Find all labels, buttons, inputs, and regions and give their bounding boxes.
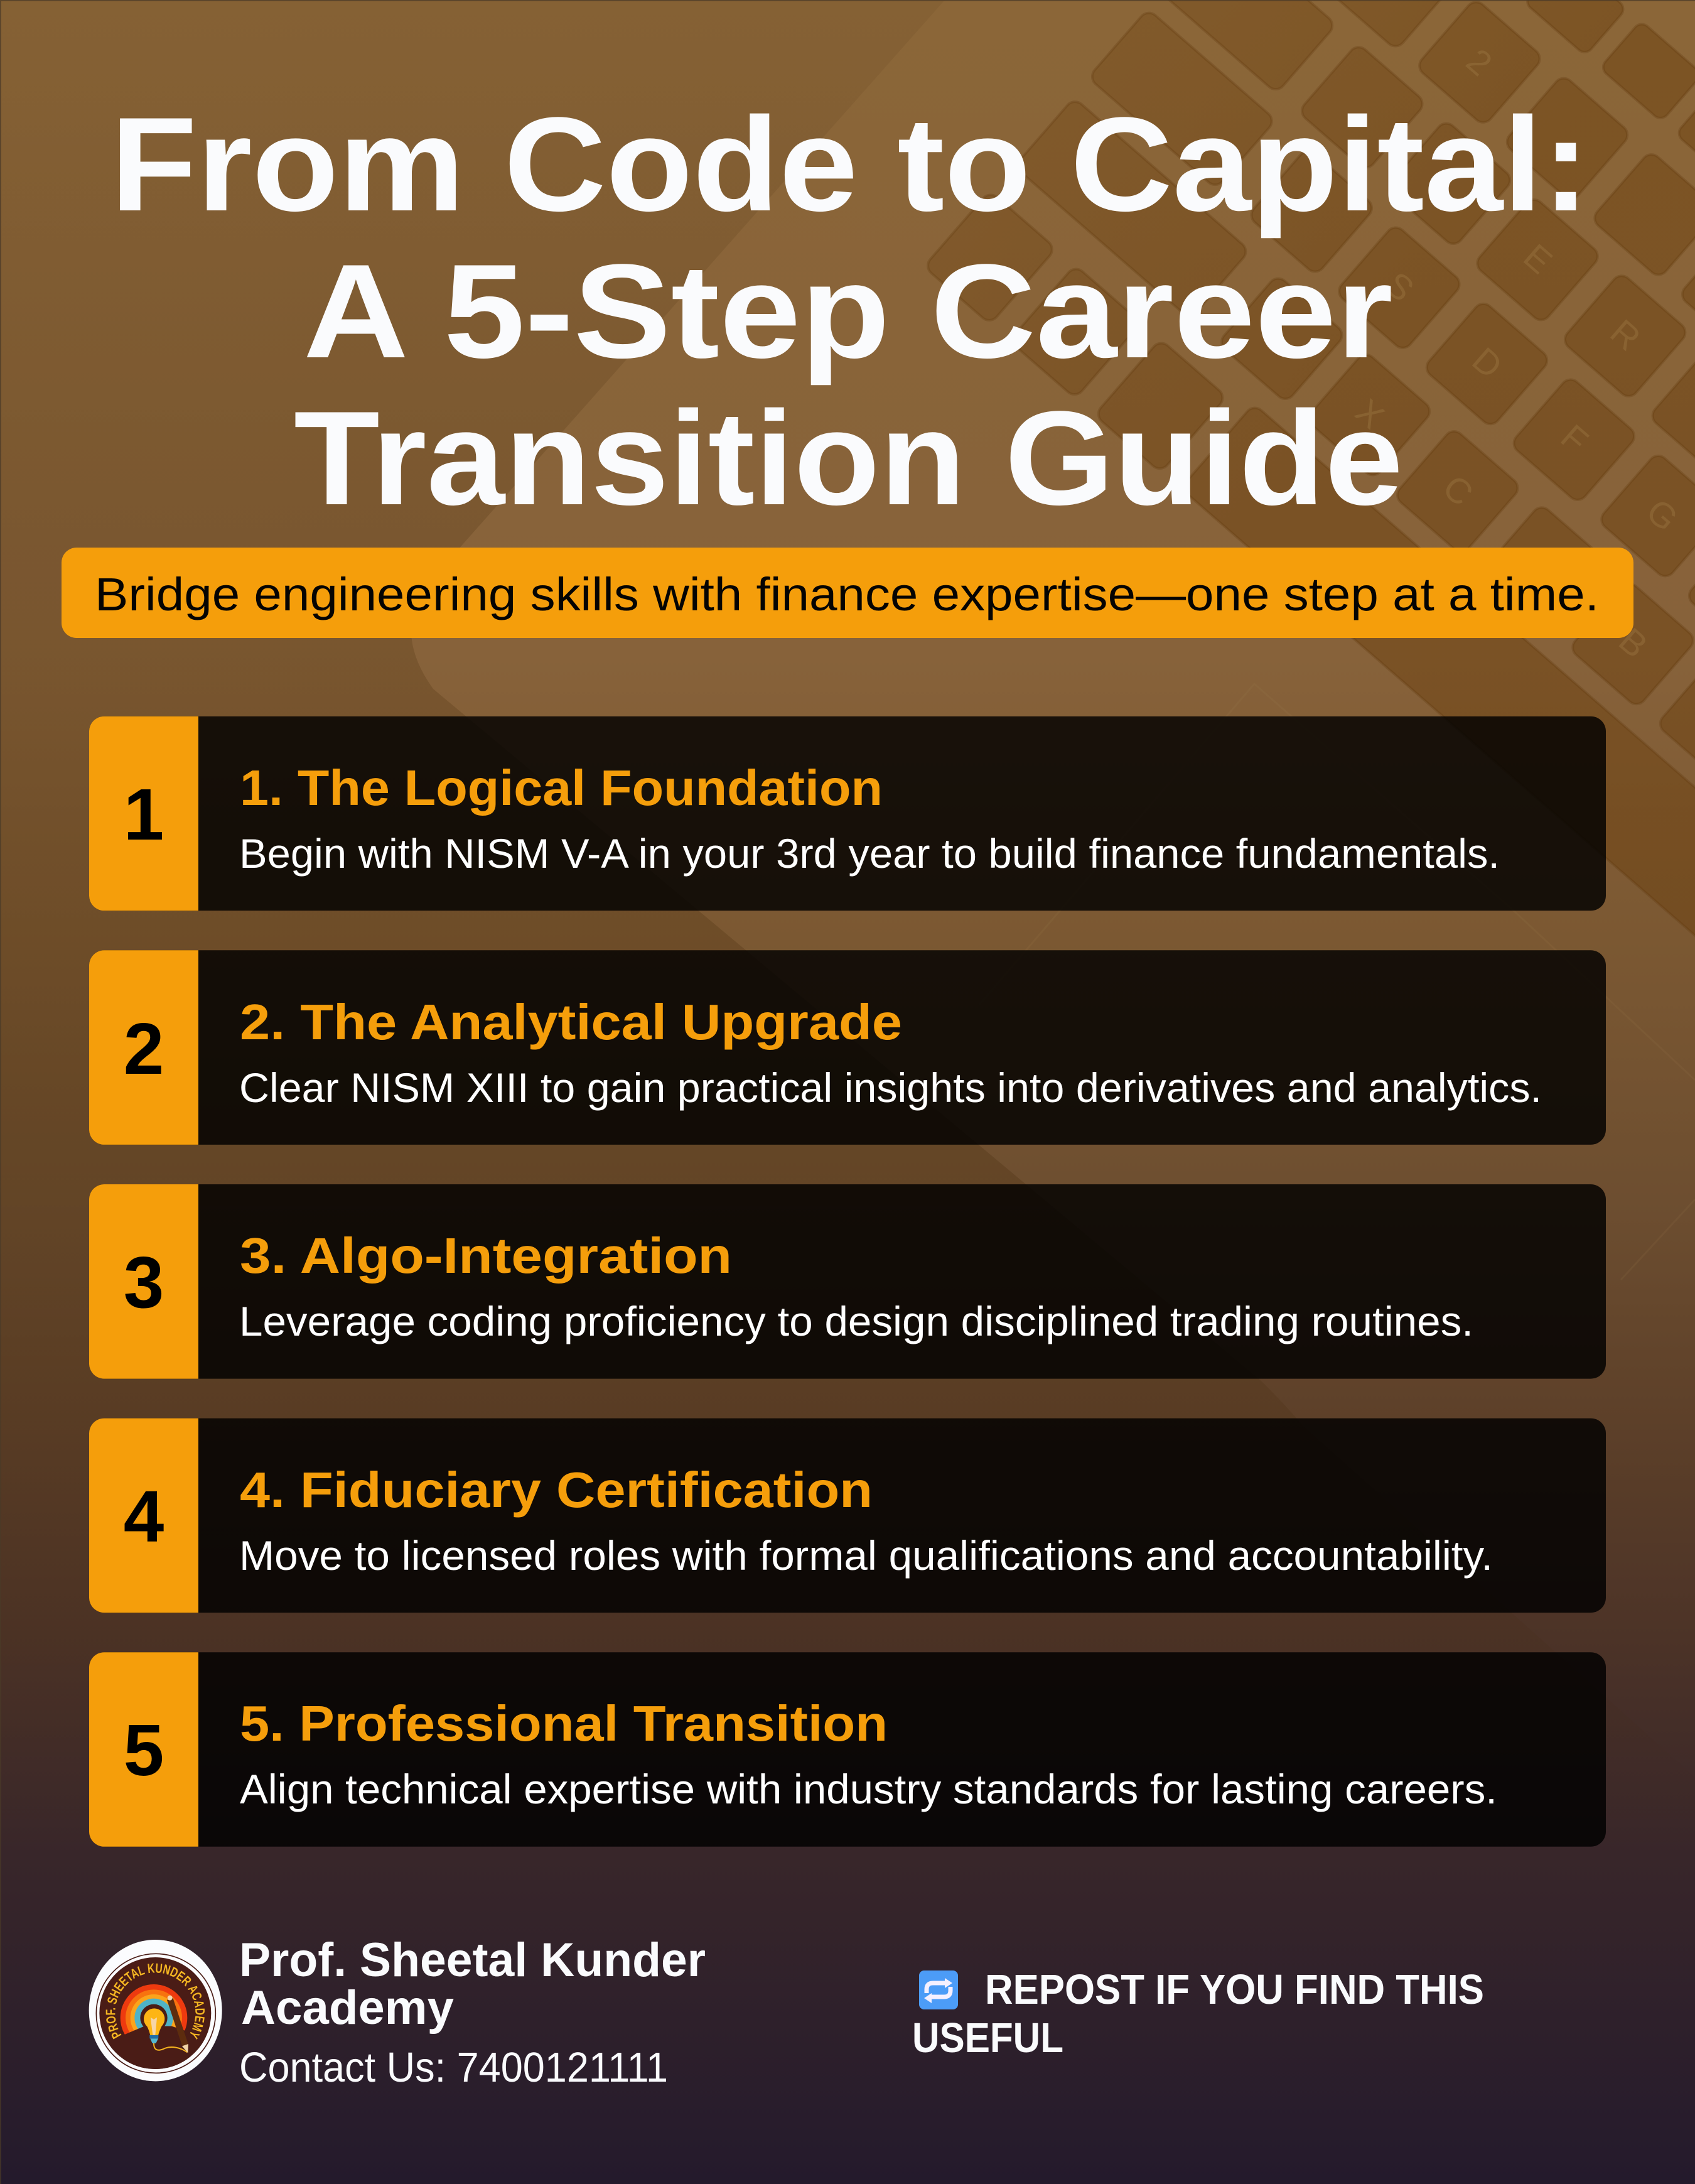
step 1 description: Begin with NISM V-A in your 3rd year to build finance fundamentals. bbox=[239, 830, 1500, 877]
step 4 number badge bbox=[89, 1419, 198, 1613]
step 5 heading: 5. Professional Transition bbox=[240, 1695, 888, 1751]
academy name and contact bbox=[239, 1933, 706, 2091]
panel: step 1 bbox=[89, 716, 1606, 911]
background: blurred laptop photo under gradient: F bbox=[1554, 416, 1596, 460]
step 3 number badge: 3 bbox=[124, 1241, 164, 1323]
panel: step 3 bbox=[89, 1184, 1606, 1379]
background: blurred laptop photo under gradient: 2 bbox=[1459, 41, 1500, 84]
step 5 number badge: 5 bbox=[124, 1709, 164, 1791]
panel: step 5 bbox=[89, 1652, 1606, 1847]
repost call to action: USEFUL bbox=[912, 2014, 1063, 2062]
academy name and contact: Prof. Sheetal Kunder bbox=[239, 1933, 706, 1987]
step 1 number badge bbox=[89, 716, 198, 911]
background: blurred laptop photo under gradient: X bbox=[1348, 391, 1392, 436]
academy name and contact: Academy bbox=[241, 1981, 454, 2035]
step 1 number badge: 1 bbox=[124, 774, 164, 855]
subtitle banner bbox=[62, 548, 1633, 638]
step 4 heading: 4. Fiduciary Certification bbox=[240, 1462, 873, 1518]
background: blurred laptop photo under gradient: D bbox=[1465, 340, 1510, 386]
icon: academy logo bbox=[89, 1940, 222, 2081]
step 4 description: Move to licensed roles with formal qualifications and accountability. bbox=[239, 1532, 1493, 1579]
step 2 description: Clear NISM XIII to gain practical insights into derivatives and analytics. bbox=[239, 1064, 1542, 1111]
step 3 number badge bbox=[89, 1184, 198, 1379]
background: blurred laptop photo under gradient: R bbox=[1603, 311, 1649, 358]
step 5 number badge bbox=[89, 1652, 198, 1847]
step 1 heading: 1. The Logical Foundation bbox=[240, 760, 883, 816]
academy name and contact: Contact Us: 7400121111 bbox=[239, 2044, 668, 2091]
title: Transition Guide bbox=[294, 384, 1403, 533]
step 4 number badge: 4 bbox=[124, 1476, 164, 1557]
icon: repost bbox=[919, 1970, 958, 2009]
background: blurred laptop photo under gradient: B bbox=[1612, 620, 1655, 666]
step 3 description: Leverage coding proficiency to design disciplined trading routines. bbox=[239, 1298, 1473, 1344]
title bbox=[110, 90, 1590, 533]
repost call to action: REPOST IF YOU FIND THIS bbox=[985, 1966, 1484, 2013]
step 5 description: Align technical expertise with industry standards for lasting careers. bbox=[240, 1766, 1497, 1812]
background: blurred laptop photo under gradient: E bbox=[1516, 236, 1560, 281]
step 2 heading: 2. The Analytical Upgrade bbox=[240, 994, 902, 1050]
panel: step 2 bbox=[89, 950, 1606, 1145]
title: A 5-Step Career bbox=[303, 237, 1393, 386]
background: blurred laptop photo under gradient: C bbox=[1436, 467, 1481, 514]
step 2 number badge bbox=[89, 950, 198, 1145]
repost call to action bbox=[912, 1966, 1484, 2062]
title: From Code to Capital: bbox=[110, 90, 1590, 239]
background: blurred laptop photo under gradient: S bbox=[1378, 264, 1422, 309]
panel: step 4 bbox=[89, 1419, 1606, 1613]
subtitle banner: Bridge engineering skills with finance expertise—one step at a time. bbox=[95, 568, 1599, 620]
icon: academy logo: PROF. SHEETAL KUNDER ACADEMY bbox=[105, 1963, 205, 2040]
step 2 number badge: 2 bbox=[124, 1008, 164, 1089]
background: blurred laptop photo under gradient: G bbox=[1639, 491, 1686, 539]
step 3 heading: 3. Algo-Integration bbox=[240, 1228, 732, 1284]
